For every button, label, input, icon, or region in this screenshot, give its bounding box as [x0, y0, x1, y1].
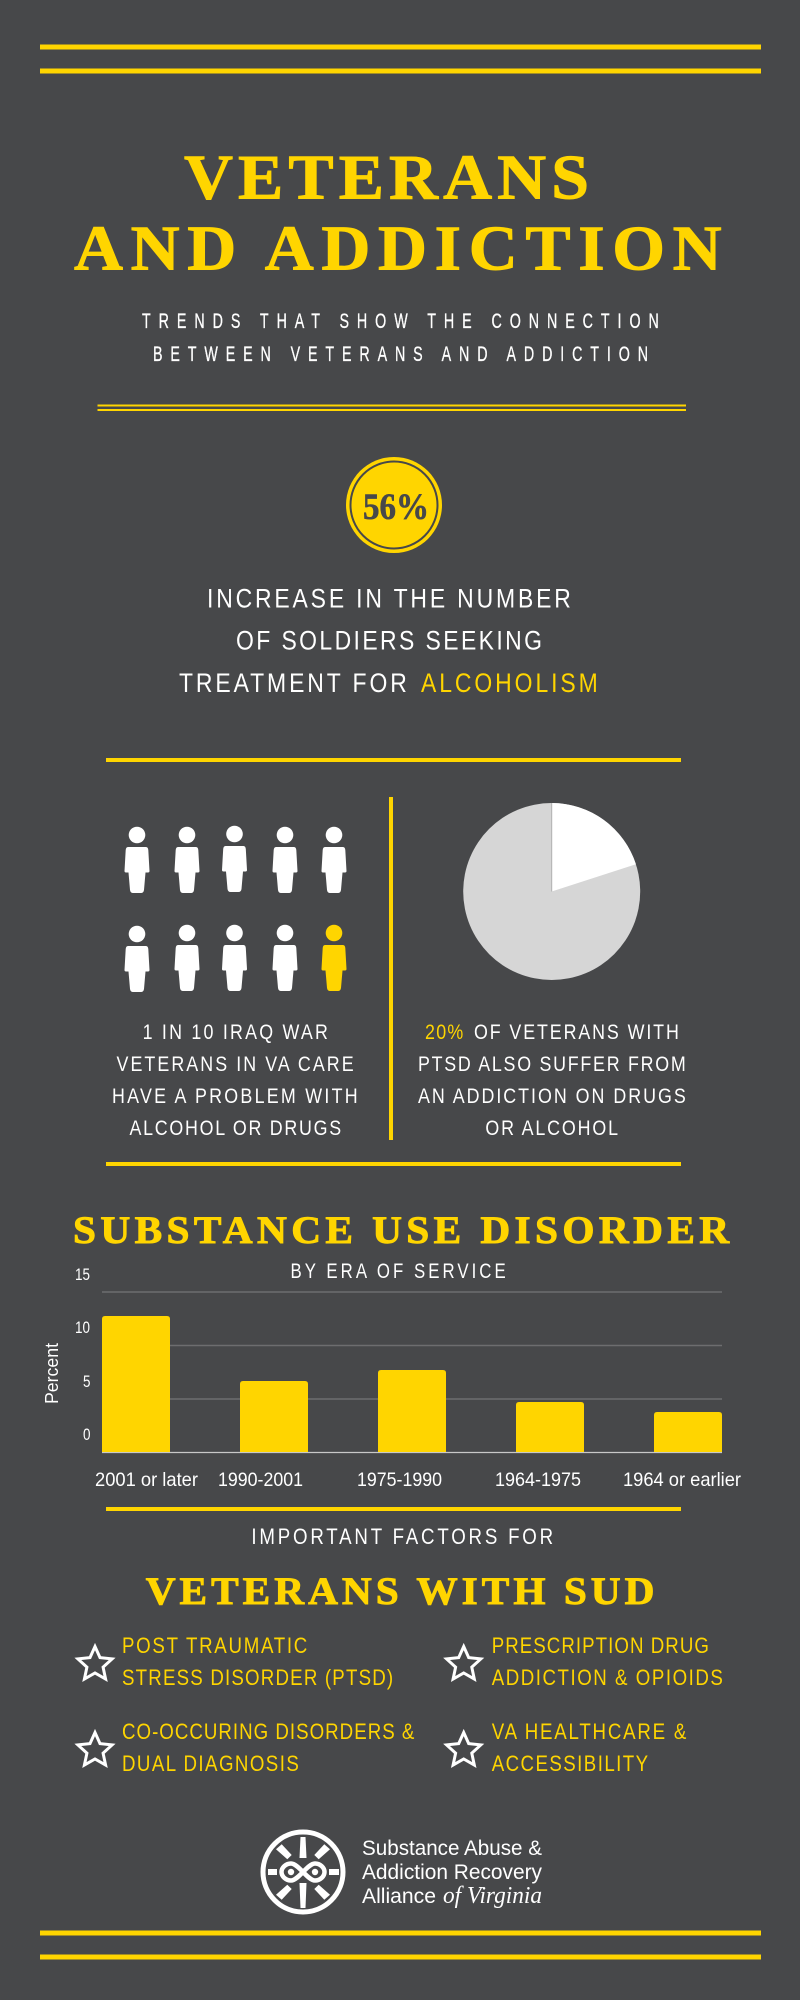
- title: [74, 142, 722, 284]
- factor text: DUAL DIAGNOSIS: [122, 1753, 299, 1776]
- factor text: STRESS DISORDER (PTSD): [122, 1667, 393, 1690]
- text: 1 in 10 Iraq war veterans: [112, 1021, 358, 1140]
- logo wordmark: Alliance: [362, 1884, 436, 1908]
- logo wordmark: Substance Abuse &: [362, 1836, 542, 1860]
- x axis labels: [95, 1469, 741, 1491]
- icon: wheel with infinity: [263, 1832, 343, 1912]
- bars: [102, 1316, 722, 1452]
- factor text: [122, 1721, 415, 1776]
- subtitle: BETWEEN VETERANS AND ADDICTION: [153, 342, 648, 366]
- subtitle double rule: [98, 404, 686, 411]
- text: 20 percent PTSD and addiction: AN ADDICTION ON DRUGS: [418, 1085, 686, 1108]
- bottom double rule: [40, 1930, 761, 1960]
- y axis labels: 0: [83, 1426, 90, 1444]
- heading: substance use disorder: SUBSTANCE USE DISORDER: [73, 1208, 730, 1252]
- factor text: [122, 1635, 393, 1690]
- factor text: [492, 1635, 723, 1690]
- factor: prescription drugs: [447, 1635, 723, 1690]
- heading: veterans with SUD: VETERANS WITH SUD: [146, 1569, 654, 1613]
- top double rule: [40, 44, 761, 74]
- panel: 1 in 10 veterans: [112, 826, 358, 1140]
- factor: co-occurring disorders: [78, 1721, 415, 1776]
- y axis labels: 5: [83, 1373, 90, 1391]
- icon: star: [78, 1732, 112, 1765]
- title: AND ADDICTION: [74, 213, 722, 284]
- factor text: VA HEALTHCARE &: [492, 1721, 687, 1744]
- alcoholism statistic text: INCREASE IN THE NUMBER: [207, 584, 571, 614]
- alcoholism statistic text: [179, 584, 598, 698]
- vertical divider between panels: [389, 797, 393, 1140]
- badge: 56%: [346, 457, 442, 553]
- subtitle: TRENDS THAT SHOW THE CONNECTION: [142, 309, 659, 333]
- subheading: by era of service: BY ERA OF SERVICE: [290, 1260, 506, 1284]
- subtitle: [142, 309, 659, 366]
- text: 20 percent PTSD and addiction: OR ALCOHOL: [485, 1117, 618, 1140]
- pictogram: ten people: [124, 826, 346, 992]
- icon: star: [78, 1646, 112, 1679]
- x axis labels: 1964 or earlier: [623, 1469, 741, 1491]
- logo wordmark: Addiction Recovery: [362, 1860, 542, 1884]
- factor text: ACCESSIBILITY: [492, 1753, 648, 1776]
- text: 20 percent PTSD and addiction: [418, 1021, 686, 1140]
- factor text: [492, 1721, 687, 1776]
- rule below chart: [106, 1507, 681, 1511]
- x axis labels: 2001 or later: [95, 1469, 198, 1491]
- badge: 56%: 56%: [363, 487, 429, 528]
- rule above statistics panel: [106, 758, 681, 762]
- factor: PTSD: [78, 1635, 393, 1690]
- x axis labels: 1964-1975: [495, 1469, 581, 1491]
- text: 1 in 10 Iraq war veterans: VETERANS IN VA CARE: [116, 1053, 354, 1076]
- factor text: POST TRAUMATIC: [122, 1635, 307, 1658]
- logo: Substance Abuse and Addiction Recovery Alliance of Virginia: [263, 1832, 542, 1912]
- icon: star: [447, 1732, 481, 1765]
- text: 20 percent PTSD and addiction: 20%: [425, 1021, 463, 1044]
- alcoholism statistic text: OF SOLDIERS SEEKING: [236, 626, 542, 656]
- pie chart: 20 percent: [463, 803, 640, 980]
- x axis labels: 1975-1990: [357, 1469, 442, 1491]
- logo wordmark: [362, 1836, 542, 1909]
- text: 1 in 10 Iraq war veterans: HAVE A PROBLEM WITH: [112, 1085, 358, 1108]
- text: 20 percent PTSD and addiction: OF VETERANS WITH: [474, 1021, 679, 1044]
- x axis labels: 1990-2001: [218, 1469, 303, 1491]
- factor text: CO-OCCURING DISORDERS &: [122, 1721, 415, 1744]
- text: 1 in 10 Iraq war veterans: 1 IN 10 IRAQ WAR: [143, 1021, 328, 1044]
- alcoholism statistic text: TREATMENT FOR: [179, 668, 407, 698]
- y axis labels: 10: [75, 1319, 90, 1337]
- factor text: PRESCRIPTION DRUG: [492, 1635, 709, 1658]
- text: important factors for: IMPORTANT FACTORS FOR: [251, 1526, 553, 1549]
- panel: 20% of veterans with PTSD: [418, 803, 686, 1140]
- icon: star: [447, 1646, 481, 1679]
- rule below statistics panel: [106, 1162, 681, 1166]
- text: 1 in 10 Iraq war veterans: ALCOHOL OR DRUGS: [130, 1117, 341, 1140]
- logo wordmark: of Virginia: [443, 1883, 542, 1909]
- alcoholism statistic text: ALCOHOLISM: [421, 668, 598, 698]
- factor text: ADDICTION & OPIOIDS: [492, 1667, 723, 1690]
- y axis labels: 15: [75, 1266, 90, 1284]
- bar chart: percent by era of service: [42, 1266, 741, 1491]
- text: 20 percent PTSD and addiction: PTSD ALSO SUFFER FROM: [418, 1053, 686, 1076]
- title: VETERANS: [184, 142, 589, 213]
- factor: VA healthcare: [447, 1721, 687, 1776]
- y axis title: Percent: [42, 1343, 62, 1404]
- y axis labels: [75, 1266, 90, 1444]
